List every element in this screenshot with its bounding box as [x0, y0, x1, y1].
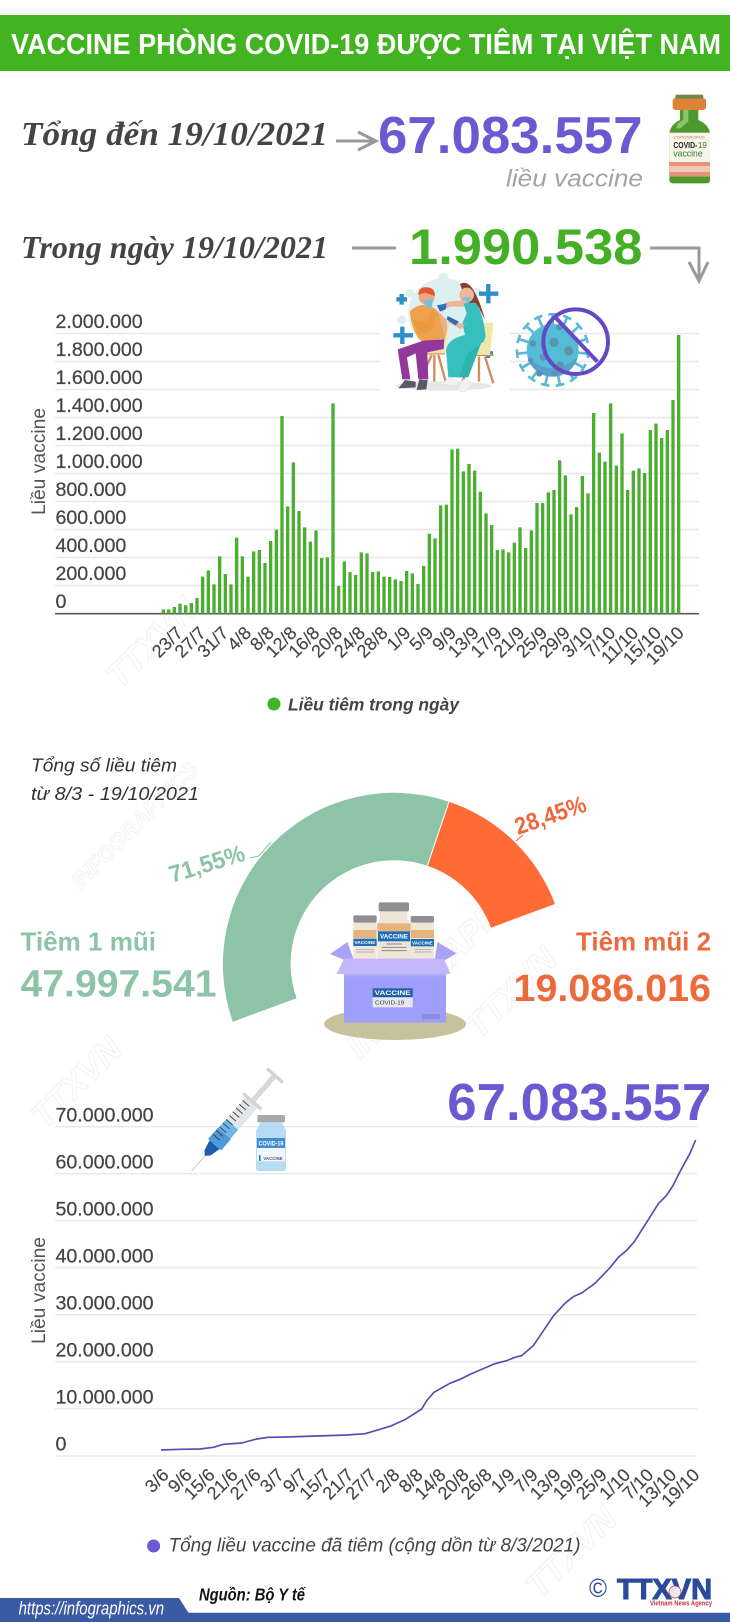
icon: vaccination scene: [380, 270, 510, 400]
x axis labels: 13/10: [634, 1465, 680, 1511]
first dose block: 47.997.541: [20, 964, 216, 1006]
text: INFOGRAPHICS: [66, 756, 203, 894]
x axis labels: 24/8: [330, 623, 369, 662]
icon: crossed-out virus: [517, 309, 608, 386]
x axis labels: 23/7: [148, 623, 187, 662]
header banner: [0, 15, 730, 71]
y axis labels: 0: [56, 591, 66, 613]
x axis labels: 25/9: [572, 1465, 611, 1504]
y axis labels: 1.400.000: [56, 395, 143, 417]
y axis title: Liều vaccine: [29, 1237, 50, 1344]
line chart legend: Tổng liều vaccine đã tiêm (cộng dồn từ 8/3/2021): [168, 1535, 580, 1557]
connector line: [352, 246, 396, 250]
x axis labels: 31/7: [193, 623, 232, 662]
y axis labels: 1.600.000: [56, 367, 143, 389]
x axis labels: 8/8: [395, 1465, 427, 1497]
text: INFOGRAPHICS: [339, 854, 550, 1066]
x axis labels: 15/6: [180, 1465, 219, 1504]
footer band: [0, 1598, 730, 1622]
vials: VACCINE: [355, 940, 375, 945]
x axis labels: 27/7: [342, 1465, 380, 1504]
first dose block: [20, 927, 216, 1006]
icon: vaccine vial: [669, 95, 710, 183]
icon: vaccine vial: COVID-: [673, 140, 698, 150]
x axis labels: 21/9: [490, 623, 528, 662]
daily doses heading: Trong ngày 19/10/2021: [21, 229, 328, 265]
first dose segment: [223, 793, 449, 1022]
x axis labels: 7/10: [581, 623, 619, 662]
arrow: total to number: [336, 132, 376, 150]
x axis labels: 15/10: [619, 623, 665, 669]
y axis labels: 400.000: [56, 535, 126, 557]
y axis labels: 800.000: [56, 479, 126, 501]
icon: vaccine box: COVID-19: [375, 1001, 404, 1007]
doses caption: liều vaccine: [506, 166, 643, 192]
second dose block: 19.086.016: [514, 968, 711, 1010]
x axis labels: 3/10: [558, 623, 597, 662]
gauge chart: dose share: [166, 791, 590, 1022]
vials: VACCINE: [412, 940, 433, 945]
x axis labels: 11/10: [597, 623, 642, 668]
nurse: [460, 283, 485, 320]
x axis labels: 7/10: [618, 1465, 657, 1504]
x axis labels: 19/10: [642, 623, 688, 669]
x axis labels: 13/9: [444, 623, 483, 662]
icon: syringe and vial: COVID-19: [259, 1141, 284, 1147]
x axis labels: 15/7: [295, 1465, 334, 1504]
icon: vaccine box: [324, 902, 466, 1040]
second dose share label: 28,45%: [511, 791, 590, 841]
y axis labels: 50.000.000: [56, 1199, 154, 1221]
x axis labels: 2/8: [372, 1465, 404, 1497]
x axis labels: 4/8: [223, 623, 255, 655]
cumulative line: [161, 1140, 696, 1450]
y axis labels: 2.000.000: [56, 311, 143, 333]
text: TTXVN: [519, 1499, 625, 1606]
x axis labels: [148, 623, 688, 669]
x axis labels: 13/9: [526, 1465, 565, 1504]
first dose share label: 71,55%: [166, 840, 248, 889]
x axis labels: 8/8: [246, 623, 278, 655]
arrow: daily number to chart: [650, 248, 708, 281]
y axis labels: 10.000.000: [56, 1387, 154, 1409]
icon: syringe and vial: [183, 1066, 286, 1179]
logo: TTXVN: TTXVN: [617, 1574, 712, 1606]
y axis labels: 20.000.000: [56, 1340, 154, 1362]
website: https://infographics.vn: [19, 1598, 164, 1618]
text: TTXVN: [24, 1029, 130, 1136]
line chart: cumulative doses: [29, 1105, 703, 1511]
x axis labels: 5/9: [405, 623, 437, 655]
chairs: [418, 353, 446, 382]
box label: [373, 988, 413, 997]
patient: [438, 312, 447, 340]
gauge note: [31, 754, 199, 804]
icon: vaccine vial: 19: [698, 141, 707, 150]
x axis labels: 19/9: [549, 1465, 588, 1504]
text: TTXVN: [99, 589, 205, 696]
y axis labels: 1.000.000: [56, 451, 143, 473]
y axis labels: 600.000: [56, 507, 126, 529]
x axis labels: 28/8: [353, 623, 392, 662]
x axis labels: 1/9: [383, 623, 415, 655]
syringe: [183, 1066, 285, 1179]
x axis labels: 17/9: [467, 623, 506, 662]
plus signs: [393, 284, 498, 358]
icon: vaccine vial: CORONAVIRUS: [674, 136, 706, 140]
x axis labels: 1/9: [487, 1465, 519, 1497]
total doses number: 67.083.557: [378, 107, 642, 165]
bar chart legend: Liều tiêm trong ngày: [288, 694, 460, 714]
logo: TTXVN: ©: [589, 1573, 607, 1603]
x axis labels: 3/7: [256, 1465, 288, 1497]
vials: VACCINE: [380, 934, 408, 941]
x axis labels: 12/8: [262, 623, 301, 662]
y axis labels: 40.000.000: [56, 1246, 154, 1268]
x axis labels: 20/8: [434, 1465, 473, 1504]
x axis labels: 9/9: [428, 623, 460, 655]
y axis labels: 1.800.000: [56, 339, 143, 361]
bars: [163, 403, 361, 614]
y axis labels: 0: [56, 1434, 66, 1456]
x axis labels: 16/8: [285, 623, 323, 662]
icon: vaccine vial: vaccine: [673, 148, 703, 158]
y axis labels: 200.000: [56, 563, 126, 585]
second dose block: [514, 927, 711, 1010]
x axis labels: 1/10: [595, 1465, 634, 1504]
x axis labels: 27/7: [171, 623, 210, 662]
y axis labels: [56, 311, 143, 613]
x axis labels: 9/6: [164, 1465, 196, 1497]
x axis labels: 9/7: [279, 1465, 311, 1497]
y axis labels: 70.000.000: [56, 1105, 154, 1127]
logo: TTXVN: Vietnam News Agency: [650, 1598, 713, 1608]
x axis labels: 21/6: [203, 1465, 242, 1504]
second dose block: Tiêm mũi 2: [576, 927, 711, 957]
x axis labels: 29/9: [535, 623, 574, 662]
x axis labels: 20/8: [307, 623, 346, 662]
x axis labels: 7/9: [510, 1465, 542, 1497]
x axis labels: 3/6: [141, 1465, 173, 1497]
x axis labels: 27/6: [226, 1465, 265, 1504]
y axis labels: 30.000.000: [56, 1293, 154, 1315]
y axis labels: [56, 1105, 154, 1456]
daily doses number: 1.990.538: [409, 219, 642, 275]
y axis labels: 60.000.000: [56, 1152, 154, 1174]
x axis labels: [141, 1465, 703, 1511]
total doses heading: Tổng đến 19/10/2021: [21, 116, 328, 153]
x axis labels: 19/10: [657, 1465, 703, 1511]
gauge note: Tổng số liều tiêm: [31, 754, 177, 776]
y axis labels: 1.200.000: [56, 423, 143, 445]
x axis labels: 26/8: [457, 1465, 496, 1504]
first dose block: Tiêm 1 mũi: [20, 927, 156, 957]
vials: [353, 902, 434, 961]
x axis labels: 21/7: [319, 1465, 357, 1504]
bar chart: daily doses: [29, 311, 699, 669]
gauge note: từ 8/3 - 19/10/2021: [31, 783, 199, 804]
y axis title: Liều vaccine: [29, 408, 50, 515]
x axis labels: 14/8: [411, 1465, 450, 1504]
icon: vaccine box: VACCINE: [375, 990, 411, 997]
vial: [257, 1115, 285, 1122]
cumulative total number: 67.083.557: [447, 1074, 711, 1132]
icon: syringe and vial: VACCINE: [263, 1156, 283, 1161]
x axis labels: 25/9: [512, 623, 551, 662]
source: Nguồn: Bộ Y tế: [199, 1585, 307, 1605]
second dose segment: [427, 802, 555, 928]
text: TTXVN: [459, 939, 565, 1046]
